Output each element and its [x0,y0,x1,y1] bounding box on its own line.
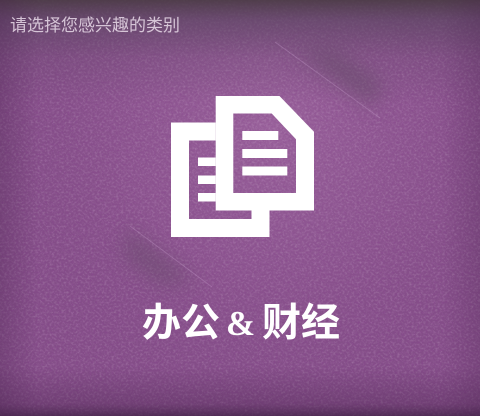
background: upper diagonal fold [275,42,385,118]
background: lower diagonal fold [122,226,212,287]
title: 财经 [262,292,340,348]
prompt text: 请选择您感兴趣的类别 [10,16,180,35]
icon: documents [171,96,314,237]
icon: front document [216,96,314,210]
icon: back document [171,122,270,237]
title: 办公 [142,292,220,348]
title: & [226,304,255,343]
